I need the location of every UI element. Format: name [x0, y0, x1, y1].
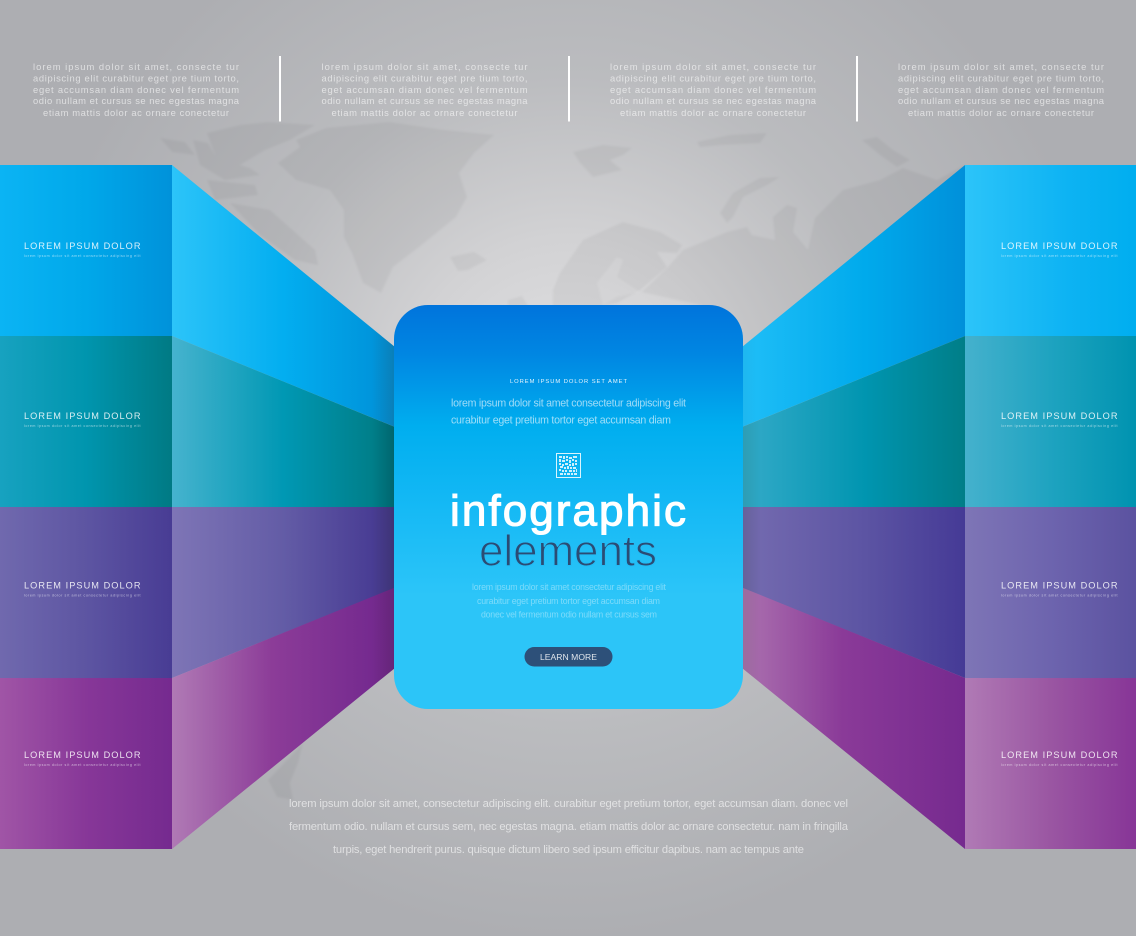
panel: purple right: lorem ipsum dolor sit amet consectetur adipiscing elit: [1001, 763, 1118, 767]
card intro text: curabitur eget pretium tortor eget accumsan diam: [451, 414, 671, 426]
right wing ribbons: [742, 165, 965, 849]
bottom text: [289, 798, 849, 856]
panel: teal right: LOREM IPSUM DOLOR: [1001, 411, 1118, 421]
left wing ribbons: [172, 165, 395, 849]
text column 2: etiam mattis dolor ac ornare conectetur: [332, 107, 518, 118]
text column 1: adipiscing elit curabitur eget pre tium torto,: [33, 72, 239, 84]
left panels: [0, 165, 172, 849]
text column 4: lorem ipsum dolor sit amet, consecte tur: [898, 61, 1104, 72]
panel: purple left: LOREM IPSUM DOLOR: [24, 750, 141, 760]
panel: blue right: LOREM IPSUM DOLOR: [1001, 241, 1118, 251]
panel: indigo right: LOREM IPSUM DOLOR: [1001, 580, 1118, 590]
panel: blue right: [965, 165, 1136, 336]
panel: indigo left: LOREM IPSUM DOLOR: [24, 580, 141, 590]
top text columns: [33, 61, 1105, 118]
card background: [394, 305, 743, 709]
card eyebrow: LOREM IPSUM DOLOR SET AMET: [510, 379, 627, 385]
bottom text: lorem ipsum dolor sit amet, consectetur adipiscing elit. curabitur eget pretium tortor, eget accumsan diam. donec vel: [289, 798, 848, 810]
panel: purple right: [965, 678, 1136, 849]
panel: purple left: lorem ipsum dolor sit amet consectetur adipiscing elit: [24, 763, 140, 767]
text column 2: [322, 61, 528, 118]
text column 1: eget accumsan diam donec vel fermentum: [33, 84, 239, 95]
panel: blue left: LOREM IPSUM DOLOR: [24, 241, 141, 251]
panel: indigo right: [965, 507, 1136, 678]
right panels: [965, 165, 1136, 849]
panel: teal right: [965, 336, 1136, 508]
learn more button: [524, 647, 612, 666]
card body text: curabitur eget pretium tortor eget accumsan diam: [477, 596, 660, 606]
panel: blue left: lorem ipsum dolor sit amet consectetur adipiscing elit: [24, 254, 140, 258]
text column 3: etiam mattis dolor ac ornare conectetur: [620, 107, 806, 118]
panel: teal right: lorem ipsum dolor sit amet consectetur adipiscing elit: [1001, 424, 1118, 428]
world map: [160, 122, 965, 800]
panel: indigo left: lorem ipsum dolor sit amet consectetur adipiscing elit: [24, 594, 140, 598]
text column 2: adipiscing elit curabitur eget pre tium torto,: [322, 72, 528, 84]
card body text: [472, 582, 667, 620]
panel: teal left: lorem ipsum dolor sit amet consectetur adipiscing elit: [24, 424, 140, 428]
panel: indigo left: [0, 507, 172, 678]
map inland sea: [597, 257, 640, 305]
card body text: lorem ipsum dolor sit amet consectetur adipiscing elit: [472, 582, 667, 592]
panel: teal left: LOREM IPSUM DOLOR: [24, 411, 141, 421]
text column 1: [33, 61, 240, 118]
bottom text: turpis, eget hendrerit purus. quisque dictum libero sed ipsum efficitur dapibus. nam ac tempus ante: [333, 844, 804, 856]
text column 4: adipiscing elit curabitur eget pre tium torto,: [898, 72, 1104, 84]
text column 3: [610, 61, 817, 118]
title: elements: elements: [479, 526, 657, 576]
text column 3: eget accumsan diam donec vel fermentum: [610, 84, 816, 95]
text column 1: etiam mattis dolor ac ornare conectetur: [43, 107, 229, 118]
card body text: donec vel fermentum odio nullam et cursus sem: [481, 610, 657, 620]
text column 1: odio nullam et cursus se nec egestas magna: [33, 95, 240, 106]
text column 3: odio nullam et cursus se nec egestas magna: [610, 95, 817, 106]
panel: purple left: [0, 678, 172, 849]
text column 1: lorem ipsum dolor sit amet, consecte tur: [33, 61, 239, 72]
text column 4: [898, 61, 1105, 118]
text column 2: odio nullam et cursus se nec egestas magna: [322, 95, 528, 106]
title: infographic: infographic: [450, 486, 686, 536]
text column 3: lorem ipsum dolor sit amet, consecte tur: [610, 61, 816, 72]
panel: indigo right: lorem ipsum dolor sit amet consectetur adipiscing elit: [1001, 594, 1118, 598]
text column 3: adipiscing elit curabitur eget pre tium torto,: [610, 72, 816, 84]
icon: qr code: [556, 454, 580, 478]
text column 2: eget accumsan diam donec vel fermentum: [322, 84, 528, 95]
center card: [394, 305, 743, 709]
bottom text: fermentum odio. nullam et cursus sem, nec egestas magna. etiam mattis dolor ac ornare consectetur. nam in fringilla: [289, 821, 849, 833]
panel: teal left: [0, 336, 172, 508]
card intro text: [451, 398, 686, 426]
card intro text: lorem ipsum dolor sit amet consectetur adipiscing elit: [451, 398, 686, 410]
panel: blue left: [0, 165, 172, 336]
text column 4: odio nullam et cursus se nec egestas magna: [898, 95, 1105, 106]
panel: blue right: lorem ipsum dolor sit amet consectetur adipiscing elit: [1001, 254, 1118, 258]
text column 4: eget accumsan diam donec vel fermentum: [898, 84, 1104, 95]
text column 2: lorem ipsum dolor sit amet, consecte tur: [322, 61, 528, 72]
panel: purple right: LOREM IPSUM DOLOR: [1001, 750, 1118, 760]
text column 4: etiam mattis dolor ac ornare conectetur: [908, 107, 1094, 118]
learn more button: LEARN MORE: [540, 652, 597, 662]
